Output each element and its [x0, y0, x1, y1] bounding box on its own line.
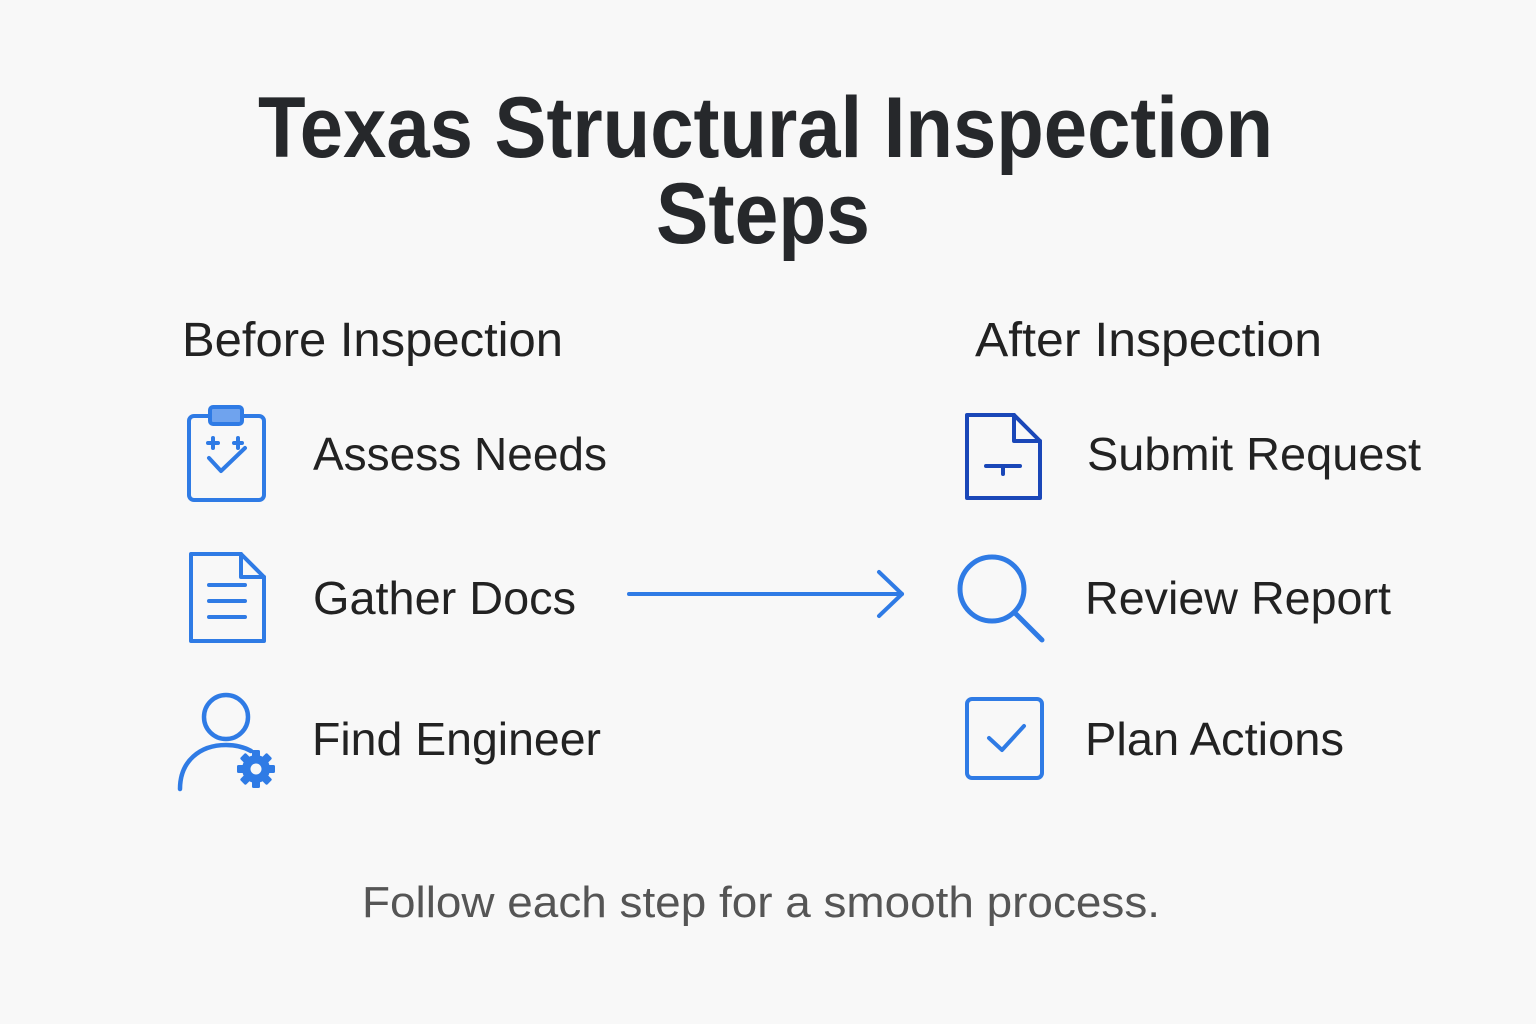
- title: Steps: [656, 166, 870, 262]
- heading: after inspection: After Inspection: [975, 314, 1322, 367]
- text: gather docs: Gather Docs: [313, 572, 576, 624]
- icon: magnifier: [960, 557, 1042, 640]
- text: submit request: Submit Request: [1087, 428, 1421, 480]
- panel: after steps: [960, 415, 1421, 778]
- title: [258, 80, 1273, 262]
- icon: clipboard: [189, 407, 264, 500]
- text: find engineer: Find Engineer: [312, 713, 601, 765]
- icon: document: [191, 554, 264, 641]
- panel: before steps: [180, 407, 607, 789]
- arrow: [629, 572, 902, 616]
- text: plan actions: Plan Actions: [1085, 713, 1344, 765]
- title: Texas Structural Inspection: [258, 80, 1273, 176]
- icon: engineer: [180, 695, 275, 789]
- footer text: Follow each step for a smooth process.: [362, 878, 1160, 927]
- text: assess needs: Assess Needs: [313, 428, 607, 480]
- text: review report: Review Report: [1085, 572, 1391, 624]
- icon: submit document: [967, 415, 1040, 498]
- icon: checkbox: [967, 699, 1042, 778]
- heading: before inspection: Before Inspection: [182, 314, 563, 367]
